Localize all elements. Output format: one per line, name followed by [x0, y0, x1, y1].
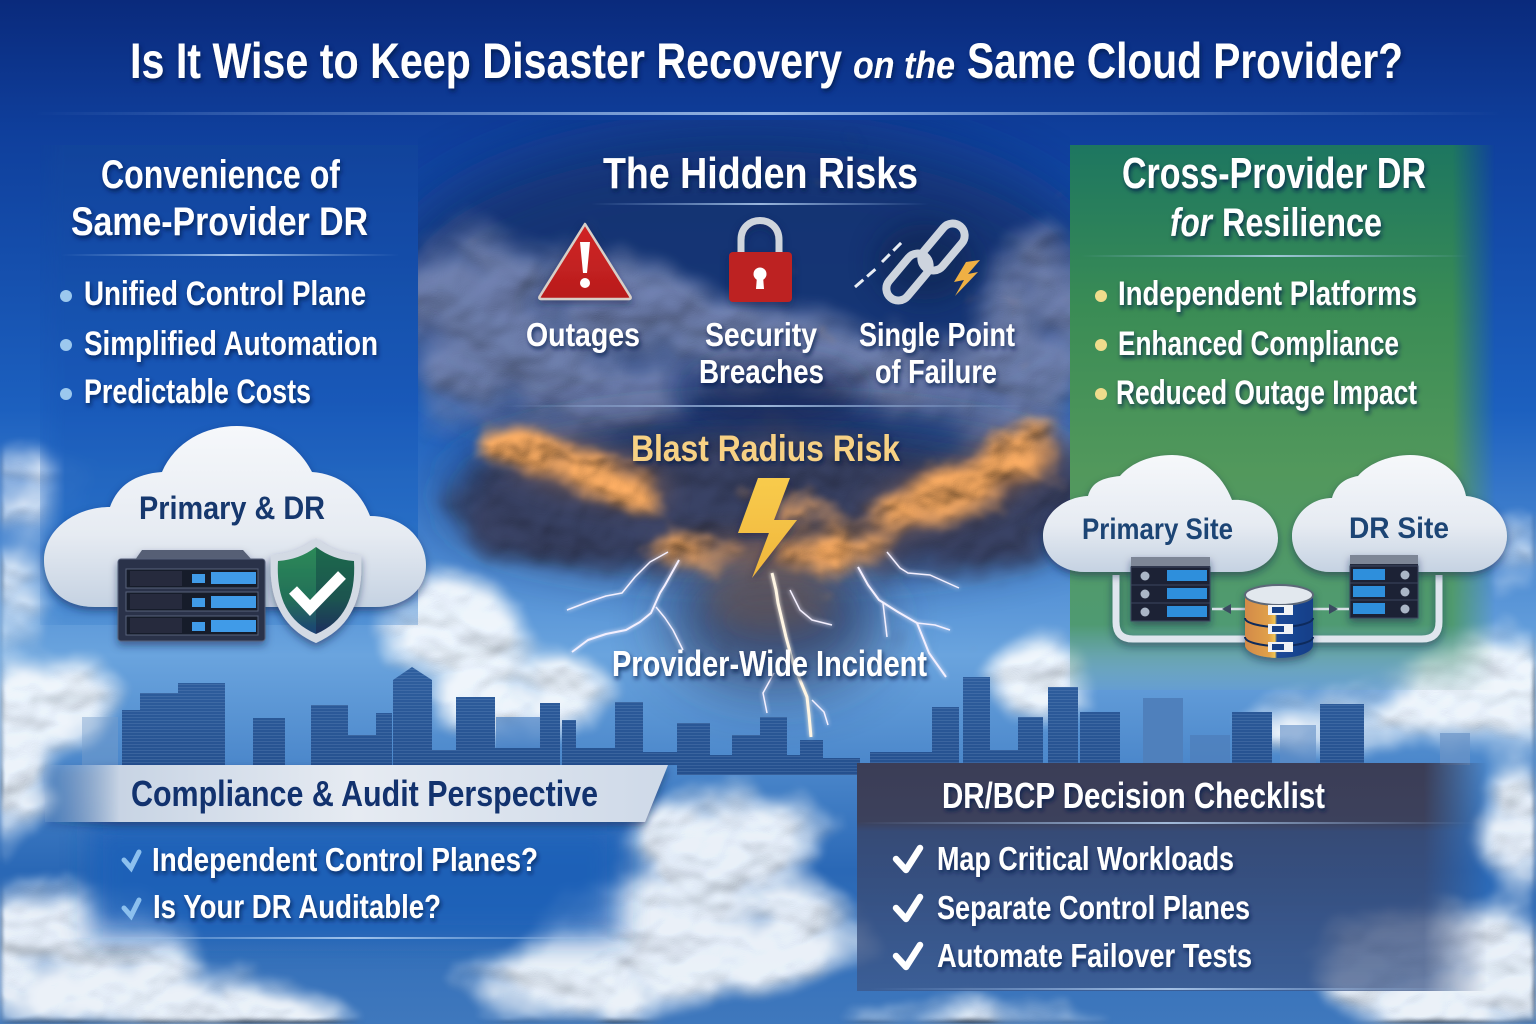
label: single point of failure: Single Point	[859, 316, 1015, 353]
list: same-provider benefits	[60, 275, 378, 411]
icon: primary and DR cloud	[44, 426, 426, 607]
title: Is It Wise to Keep Disaster Recovery	[130, 33, 842, 89]
label: provider-wide incident: Provider-Wide Incident	[612, 643, 927, 684]
list: same-provider benefits: Unified Control Plane	[84, 275, 366, 313]
icon: server rack	[118, 550, 265, 641]
list: checklist items	[896, 840, 1252, 974]
title: on the	[853, 45, 955, 87]
panel: same-provider background	[40, 428, 418, 625]
icon: DR site cloud	[1292, 455, 1507, 572]
panel: storm backdrop	[385, 130, 1105, 685]
label: security breaches: Breaches	[699, 353, 824, 390]
list: same-provider benefits: Simplified Automation	[84, 325, 378, 363]
list: checklist items: Automate Failover Tests	[937, 937, 1252, 974]
icon: green shield with check	[271, 538, 361, 643]
icon: padlock	[729, 220, 792, 302]
label: blast radius risk: Blast Radius Risk	[631, 428, 900, 469]
list: audit questions	[124, 841, 538, 925]
list: cross-provider benefits: Reduced Outage Impact	[1116, 374, 1417, 412]
list: audit questions: Is Your DR Auditable?	[153, 888, 441, 925]
label: security breaches: Security	[705, 316, 818, 353]
icon: DR servers	[1350, 555, 1418, 618]
heading: convenience of same-provider DR	[71, 153, 368, 244]
icon: DR site cloud: DR Site	[1349, 512, 1449, 545]
icon: primary servers	[1131, 557, 1210, 621]
icon: primary site cloud: Primary Site	[1082, 513, 1233, 546]
banner: compliance heading	[45, 765, 668, 822]
list: cross-provider benefits: Enhanced Compliance	[1118, 325, 1399, 363]
banner: compliance heading: Compliance & Audit Perspective	[131, 773, 598, 814]
heading: cross-provider DR for resilience: for	[1170, 201, 1214, 245]
label: single point of failure	[859, 316, 1015, 390]
title	[130, 33, 1403, 89]
heading: cross-provider DR for resilience: Resilience	[1222, 201, 1382, 245]
list: audit questions: Independent Control Planes?	[152, 841, 538, 878]
icon: broken chain	[855, 219, 980, 305]
panel: compliance and audit perspective	[45, 765, 668, 938]
arrows: data sync	[1212, 604, 1349, 614]
heading: cross-provider DR for resilience	[1122, 149, 1426, 245]
panel: cross-provider background	[1070, 145, 1495, 690]
icon: primary site cloud	[1043, 455, 1278, 572]
panel: DR/BCP decision checklist	[857, 763, 1487, 991]
heading: convenience of same-provider DR: Same-Provider DR	[71, 200, 368, 244]
list: checklist items: Separate Control Planes	[937, 889, 1250, 926]
title: Same Cloud Provider?	[967, 33, 1403, 89]
connector: replication loop	[1116, 575, 1439, 639]
heading: checklist: DR/BCP Decision Checklist	[942, 775, 1325, 816]
icon: lightning bolt	[738, 478, 797, 578]
city skyline	[82, 667, 1470, 775]
label: single point of failure: of Failure	[875, 353, 997, 390]
icon: database	[1245, 585, 1313, 658]
list: checklist items: Map Critical Workloads	[937, 840, 1234, 877]
list: cross-provider benefits: Independent Platforms	[1118, 275, 1417, 313]
list: same-provider benefits: Predictable Costs	[84, 373, 311, 411]
heading: cross-provider DR for resilience: Cross-Provider DR	[1122, 149, 1426, 198]
label: security breaches	[699, 316, 824, 390]
icon: warning triangle	[539, 224, 631, 299]
lightning strikes	[567, 552, 959, 737]
icon: primary and DR cloud: Primary & DR	[139, 490, 325, 526]
label: outages: Outages	[526, 316, 640, 353]
heading: the hidden risks: The Hidden Risks	[603, 149, 918, 198]
list: cross-provider benefits	[1095, 275, 1417, 412]
background clouds	[0, 440, 1536, 1024]
heading: convenience of same-provider DR: Convenience of	[101, 153, 341, 197]
